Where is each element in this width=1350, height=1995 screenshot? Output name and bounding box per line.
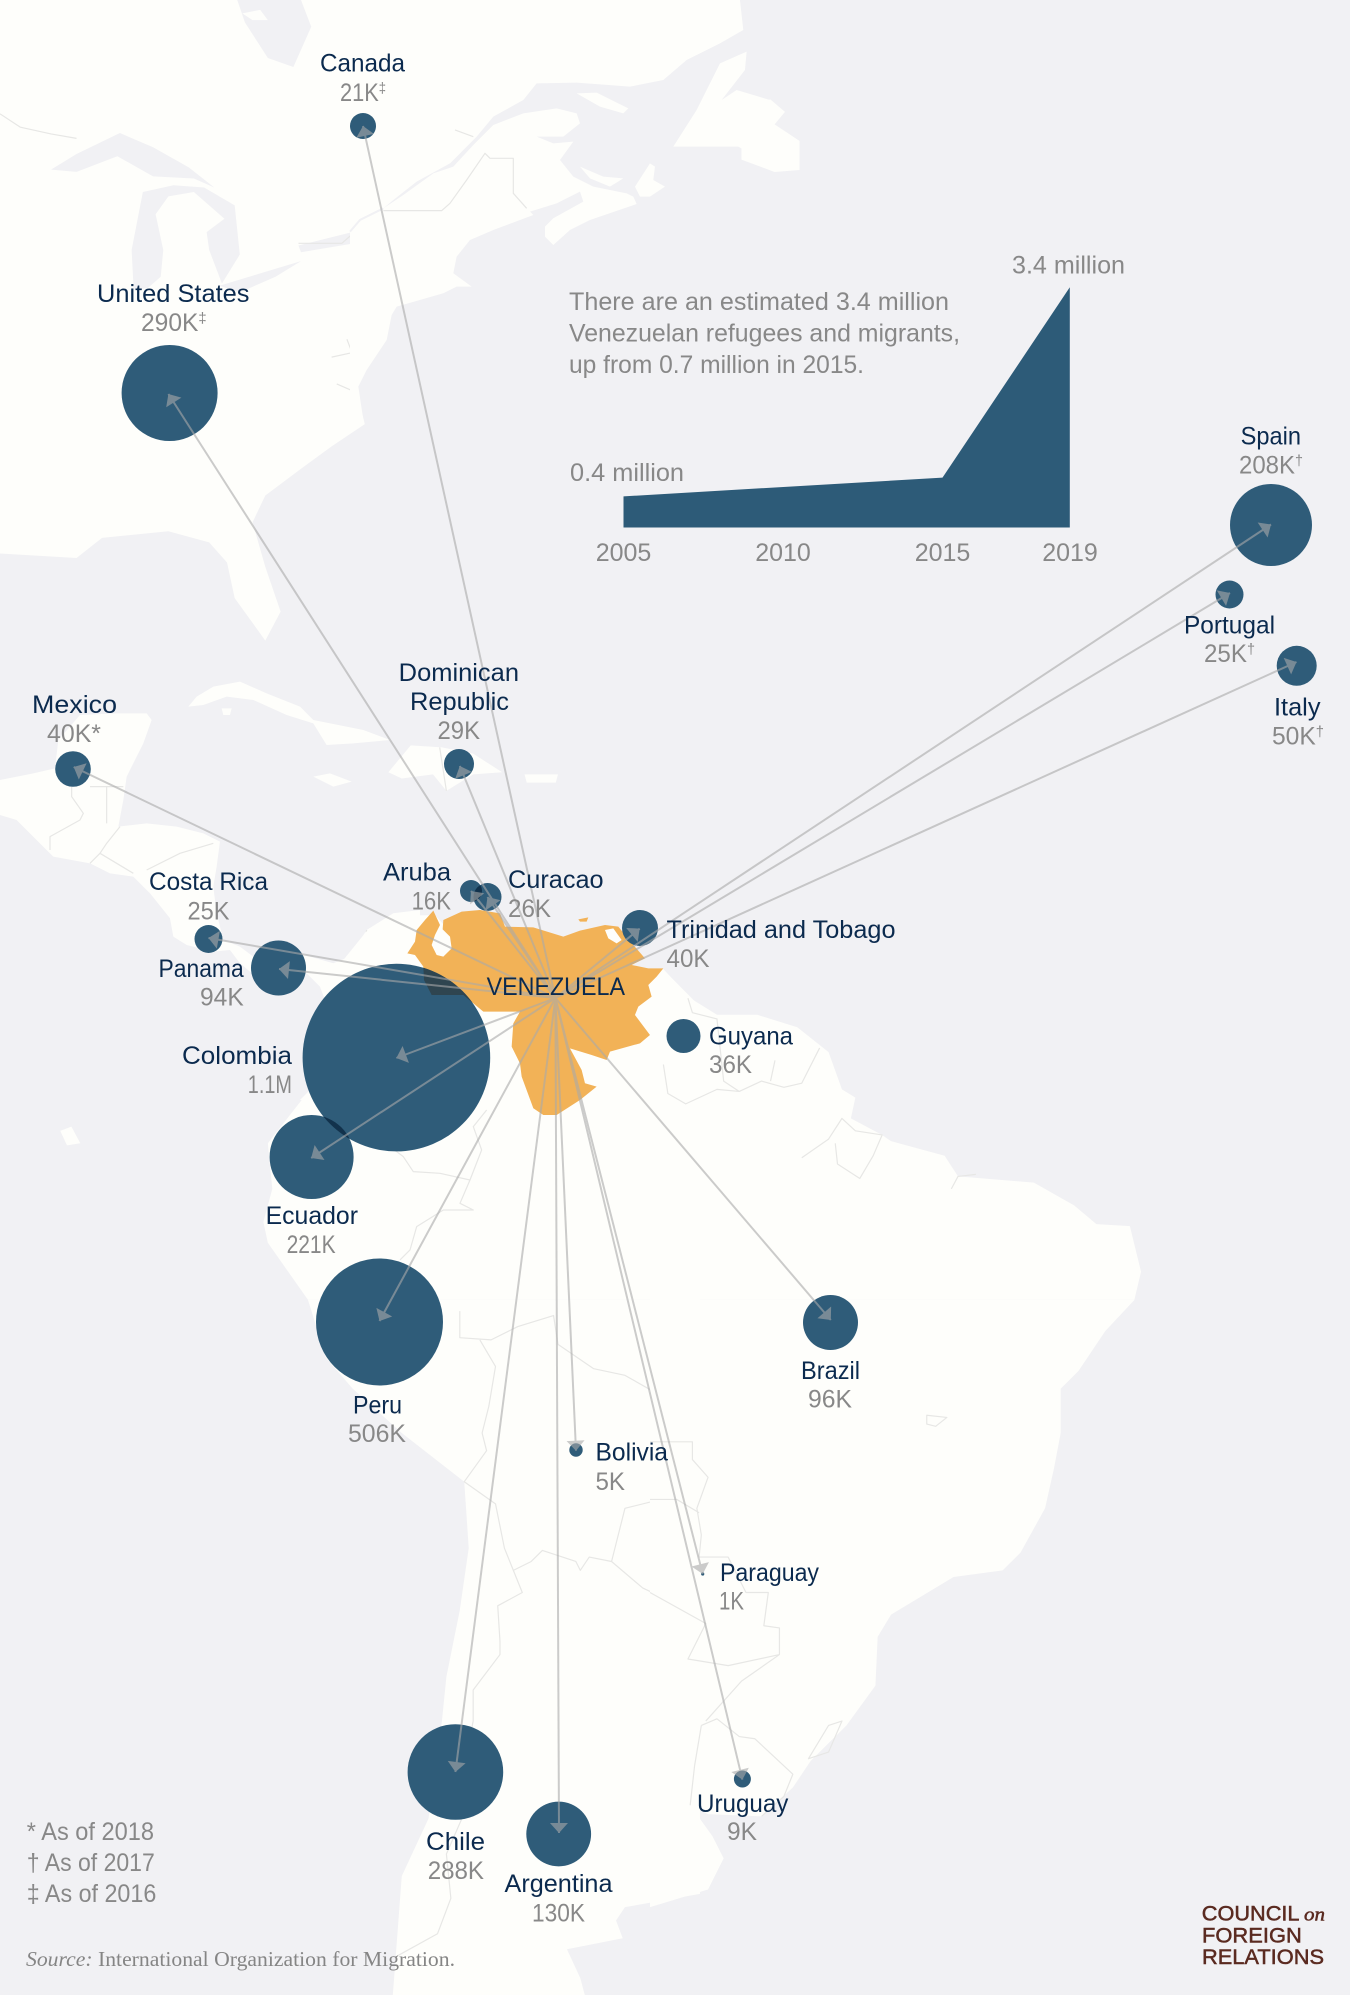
label: Portugal	[1184, 612, 1275, 668]
label: Italy	[1272, 694, 1324, 750]
arrow: Aruba	[471, 891, 555, 998]
arrow: Panama	[279, 969, 555, 998]
land: southwest South America	[308, 1300, 700, 1995]
label: Spain	[1239, 422, 1303, 480]
bubble: Aruba	[460, 880, 482, 902]
label: Chile	[426, 1828, 485, 1885]
label: Costa Rica: Costa Rica	[149, 868, 268, 896]
bubble: Peru	[316, 1258, 443, 1386]
arrow: Mexico	[74, 767, 555, 998]
footnotes legend	[27, 1818, 156, 1908]
arrow: United States	[168, 394, 555, 998]
arrow: Brazil	[555, 998, 831, 1320]
bubble: Argentina	[526, 1802, 591, 1866]
map: Venezuela	[407, 910, 663, 1115]
label: Guyana: 36K	[709, 1051, 752, 1079]
logo: Council on Foreign Relations	[1202, 1903, 1325, 1969]
label: Mexico: Mexico	[32, 691, 117, 719]
chart intro text: Venezuelan refugees and migrants,	[569, 320, 960, 348]
arrow: Uruguay	[555, 998, 742, 1780]
label: Bolivia: 5K	[596, 1468, 625, 1496]
land: western North America and Great Lakes	[0, 0, 365, 641]
arrow: Argentina	[555, 998, 559, 1833]
chart value labels	[570, 252, 1125, 487]
land: northeast South America	[650, 969, 1141, 1300]
bubble: Paraguay	[701, 1572, 704, 1576]
label: United States	[97, 280, 250, 337]
chart intro text	[569, 288, 960, 379]
bubble: Costa Rica	[194, 925, 222, 953]
land: northern South America and Hispaniola	[60, 745, 700, 1300]
label: Paraguay: Paraguay	[720, 1559, 819, 1587]
label: Bolivia: Bolivia	[596, 1438, 668, 1466]
bubble: Canada	[350, 113, 376, 139]
bubble: Brazil	[803, 1295, 858, 1350]
footnotes legend: † As of 2017	[27, 1849, 155, 1877]
label: United States: ‡	[198, 310, 207, 327]
arrow: Costa Rica	[208, 938, 555, 998]
label: Costa Rica	[149, 868, 268, 926]
label: Canada: ‡	[379, 80, 386, 97]
label: Venezuela: VENEZUELA	[487, 973, 625, 1001]
arrows from Venezuela	[74, 126, 1297, 1833]
source note: Source: International Organization for Migration.	[26, 1947, 455, 1971]
label: Italy: †	[1316, 724, 1324, 740]
label: Brazil: Brazil	[801, 1357, 860, 1385]
label: Panama: 94K	[200, 984, 244, 1012]
arrow: Chile	[455, 998, 555, 1772]
land: Andes and Amazon borders	[367, 1110, 487, 1260]
label: Dominican Republic: Republic	[410, 688, 509, 716]
label: Panama	[158, 955, 244, 1012]
land: Central America and Caribbean islands	[0, 682, 420, 1100]
arrow: Dominican Republic	[460, 766, 555, 998]
footnotes legend: * As of 2018	[27, 1818, 154, 1846]
bubble: Colombia	[303, 964, 490, 1151]
label: Mexico	[32, 691, 117, 748]
label: Mexico: 40K*	[47, 720, 101, 748]
label: United States: 290K	[141, 309, 199, 337]
arrow: Italy	[555, 662, 1296, 998]
label: Chile: 288K	[428, 1857, 484, 1885]
label: Aruba: 16K	[412, 888, 451, 916]
bubble: United States	[122, 345, 218, 441]
label: Bolivia	[596, 1438, 668, 1496]
land: Newfoundland east	[741, 99, 799, 172]
bubble: Dominican Republic	[444, 749, 474, 779]
label: Trinidad and Tobago: Trinidad and Tobago	[666, 916, 896, 944]
bubble: Colombia over Venezuela overlap	[423, 968, 472, 1002]
label: Dominican Republic	[399, 659, 519, 745]
arrow: Ecuador	[311, 998, 555, 1158]
chart year axis	[596, 539, 1098, 567]
logo: Council on Foreign Relations: on	[1304, 1905, 1325, 1926]
bubble: Trinidad and Tobago	[622, 910, 658, 946]
label: Curacao: Curacao	[508, 866, 604, 894]
bubble: Guyana	[666, 1019, 700, 1053]
label: Portugal: Portugal	[1184, 612, 1275, 640]
arrow: Peru	[380, 998, 555, 1321]
bubble: Uruguay	[734, 1770, 751, 1788]
label: Colombia: Colombia	[182, 1042, 292, 1070]
label: Chile: Chile	[426, 1828, 485, 1856]
label: Guyana	[709, 1023, 793, 1079]
label: Canada: Canada	[320, 49, 405, 77]
label: Dominican Republic: Dominican	[399, 659, 519, 687]
chart intro text: There are an estimated 3.4 million	[569, 288, 949, 316]
chart year axis: 2015	[915, 539, 970, 567]
label: Ecuador: 221K	[287, 1231, 336, 1259]
land: southeast South America	[650, 1300, 1134, 1907]
chart year axis: 2010	[755, 539, 811, 567]
bubble: Chile	[408, 1724, 503, 1820]
label: Panama: Panama	[158, 955, 244, 983]
arrow: Trinidad and Tobago	[555, 929, 640, 998]
bubble: Curacao	[474, 883, 502, 911]
label: Aruba: Aruba	[383, 858, 451, 886]
chart year axis: 2005	[596, 539, 651, 567]
label: Italy: 50K	[1272, 722, 1316, 750]
label: Guyana: Guyana	[709, 1023, 793, 1051]
footnotes legend: ‡ As of 2016	[27, 1880, 156, 1908]
chart year axis: 2019	[1042, 539, 1098, 567]
arrow: Colombia	[396, 998, 555, 1058]
label: Trinidad and Tobago: 40K	[666, 945, 710, 973]
arrow: Curacao	[488, 897, 555, 998]
label: Portugal: †	[1247, 641, 1255, 658]
chart: refugees and migrants over time	[569, 252, 1125, 567]
arrow: Spain	[555, 524, 1271, 998]
label: Uruguay	[697, 1790, 789, 1846]
label: Spain: Spain	[1241, 422, 1301, 450]
label: Canada	[320, 49, 405, 107]
chart value labels: 3.4 million	[1012, 252, 1125, 280]
logo: Council on Foreign Relations: RELATIONS	[1202, 1946, 1324, 1969]
label: Ecuador: Ecuador	[266, 1202, 358, 1230]
chart value labels: 0.4 million	[570, 459, 684, 487]
bubble: Spain	[1230, 484, 1312, 566]
land: eastern Canada and New England	[350, 0, 770, 420]
label: Aruba	[383, 858, 451, 916]
label: Curacao	[508, 866, 604, 923]
bubble: Bolivia	[569, 1443, 583, 1457]
arrow: Paraguay	[555, 998, 703, 1574]
label: Colombia	[182, 1042, 292, 1099]
label: Peru: 506K	[348, 1420, 406, 1448]
label: Argentina: 130K	[532, 1900, 585, 1928]
label: Peru: Peru	[353, 1392, 402, 1420]
label: Paraguay: 1K	[719, 1587, 744, 1615]
label: Colombia: 1.1M	[248, 1071, 292, 1099]
label: Uruguay: 9K	[727, 1818, 757, 1846]
label: Curacao: 26K	[508, 895, 551, 923]
bubble: Italy	[1277, 646, 1317, 686]
label: Argentina: Argentina	[504, 1870, 613, 1898]
bubble: Ecuador and Colombia overlap	[324, 1116, 350, 1139]
bubble: Aruba and Curacao overlap	[474, 885, 482, 902]
label: Paraguay	[719, 1559, 819, 1615]
bubble: Portugal	[1216, 580, 1244, 608]
area chart shape	[624, 287, 1070, 528]
arrow: Portugal	[555, 593, 1230, 998]
label: Trinidad and Tobago	[666, 916, 896, 973]
label: Peru	[348, 1392, 406, 1448]
label: Spain: †	[1295, 452, 1303, 470]
label: United States: United States	[97, 280, 250, 308]
arrow: Canada	[363, 126, 555, 998]
label: Brazil	[801, 1357, 860, 1414]
label: Costa Rica: 25K	[188, 898, 230, 926]
logo: Council on Foreign Relations: FOREIGN	[1202, 1925, 1302, 1948]
label: Uruguay: Uruguay	[697, 1790, 789, 1818]
label: Italy: Italy	[1274, 694, 1321, 722]
label: Argentina	[504, 1870, 613, 1928]
label: Canada: 21K	[340, 79, 384, 107]
arrow: Bolivia	[555, 998, 576, 1451]
label: Dominican Republic: 29K	[438, 717, 480, 745]
chart intro text: up from 0.7 million in 2015.	[569, 351, 864, 379]
label: Brazil: 96K	[808, 1386, 852, 1414]
logo: Council on Foreign Relations: COUNCIL	[1202, 1903, 1300, 1926]
bubble: Mexico	[55, 751, 91, 787]
label: Portugal: 25K	[1204, 640, 1248, 668]
label: Ecuador	[266, 1202, 358, 1259]
bubble: Ecuador	[270, 1115, 354, 1199]
label: Spain: 208K	[1239, 452, 1297, 480]
bubble: Panama	[251, 940, 306, 996]
